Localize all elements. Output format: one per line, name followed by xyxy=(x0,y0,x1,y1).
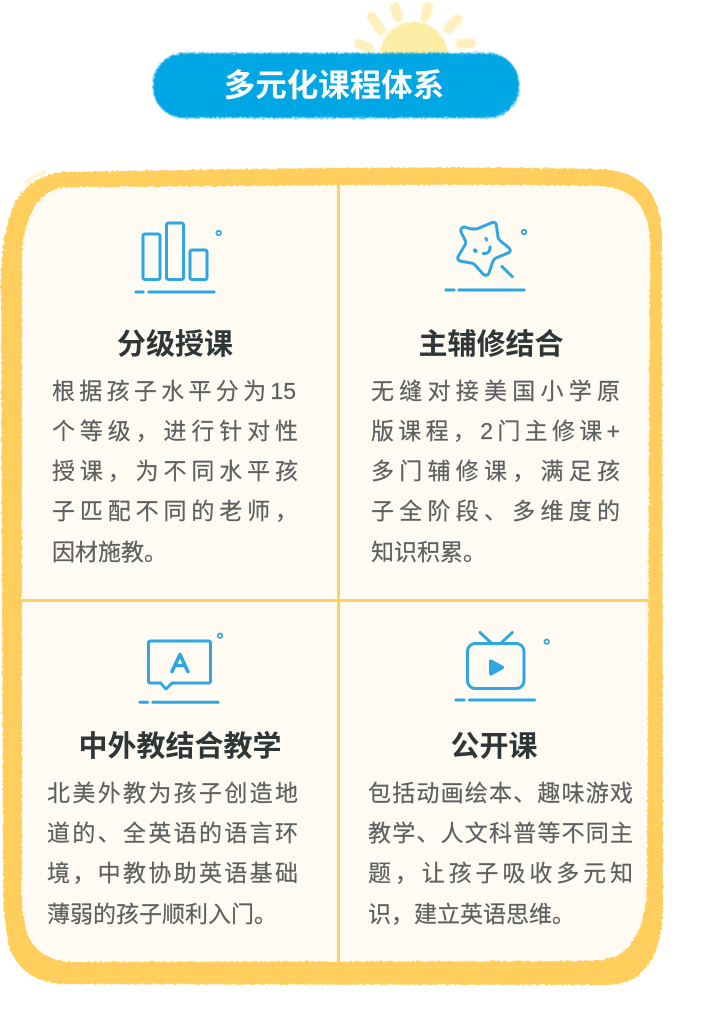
text block: 版课程，2门主修课+ xyxy=(371,418,620,444)
icon: bar chart xyxy=(134,222,222,294)
text block: 多门辅修课，满足孩 xyxy=(371,458,620,484)
text block: 北美外教为孩子创造地 xyxy=(47,780,298,806)
panel: foreign and Chinese teachers xyxy=(47,632,298,927)
text block: 题，让孩子吸收多元知 xyxy=(368,860,633,886)
heading: 分级授课 xyxy=(117,329,233,361)
heading: 主辅修结合 xyxy=(418,329,564,361)
text block xyxy=(47,780,298,927)
text block xyxy=(371,378,620,565)
icon: television with play button xyxy=(454,630,550,702)
text block: 个等级，进行针对性 xyxy=(52,418,298,444)
text block: 子全阶段、多维度的 xyxy=(371,498,620,524)
text block: 教学、人文科普等不同主 xyxy=(368,820,633,846)
icon: speech bubble with letter A xyxy=(138,632,224,704)
grid divider lines xyxy=(337,185,340,962)
heading: course system: 多元化课程体系 xyxy=(224,67,444,103)
title banner xyxy=(151,50,521,121)
text block: 道的、全英语的语言环 xyxy=(47,820,298,846)
heading: 中外教结合教学 xyxy=(78,731,282,763)
text block xyxy=(368,780,633,927)
text block: 因材施教。 xyxy=(52,539,167,565)
panel: open classes xyxy=(368,630,633,927)
text block: 知识积累。 xyxy=(371,539,486,565)
text block: 根据孩子水平分为15 xyxy=(52,378,298,404)
panel: major and minor courses xyxy=(371,220,620,565)
text block: 境，中教协助英语基础 xyxy=(47,860,298,886)
heading: 公开课 xyxy=(450,731,538,763)
text block: 识，建立英语思维。 xyxy=(368,901,575,927)
panel: graded teaching xyxy=(52,222,298,565)
icon: star wand xyxy=(444,220,528,292)
text block: 授课，为不同水平孩 xyxy=(52,458,298,484)
text block: 薄弱的孩子顺利入门。 xyxy=(47,901,277,927)
text block: 无缝对接美国小学原 xyxy=(371,378,620,404)
text block xyxy=(52,378,298,565)
text block: 包括动画绘本、趣味游戏 xyxy=(368,780,633,806)
text block: 子匹配不同的老师， xyxy=(52,498,298,524)
icon: sun behind the title banner xyxy=(354,0,478,55)
